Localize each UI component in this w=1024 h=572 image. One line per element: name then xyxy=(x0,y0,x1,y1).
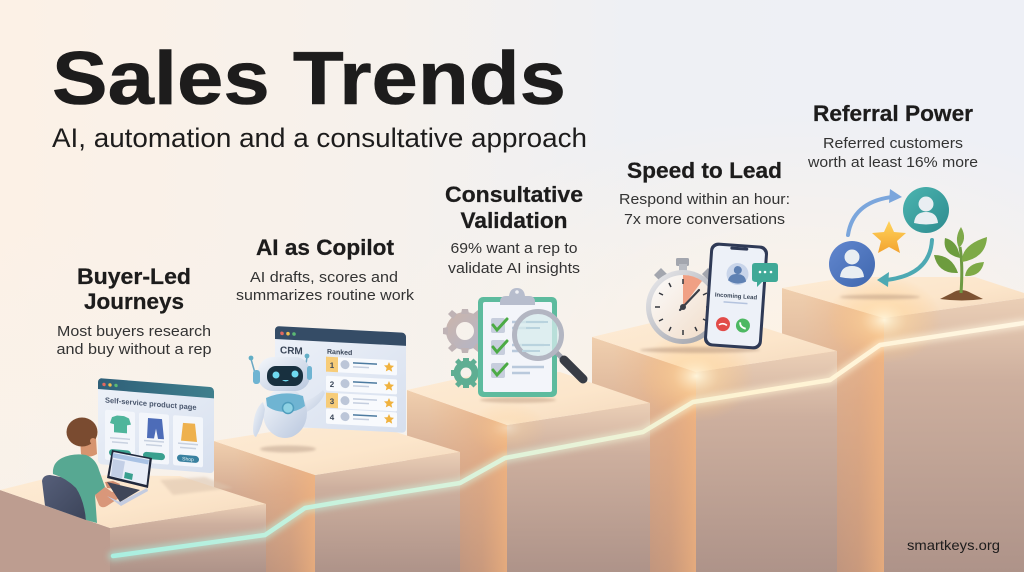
illustration: person at laptop xyxy=(42,418,233,523)
text block: AI as copilot: summarizes routine work xyxy=(236,287,415,304)
text block: consultative validation: 69% want a rep to xyxy=(450,240,578,257)
illustration: CRM ranked window xyxy=(275,326,406,433)
illustration: CRM ranked window: 3 xyxy=(330,397,335,406)
staircase: step 1 xyxy=(0,475,266,572)
staircase: step 5 xyxy=(782,277,1024,572)
staircase: step 2 xyxy=(214,425,460,572)
staircase: step 4 xyxy=(592,320,837,572)
illustration: CRM ranked window: CRM xyxy=(280,345,303,357)
text block: speed to lead: Speed to Lead xyxy=(627,158,782,183)
illustration: stopwatch xyxy=(640,258,760,353)
illustration: gears xyxy=(443,309,487,388)
illustration: self-service product page: Self-service product page xyxy=(105,396,197,412)
illustration: self-service product page xyxy=(98,378,214,473)
text block: consultative validation xyxy=(445,182,583,277)
text block: referral power: worth at least 16% more xyxy=(807,154,978,171)
text block: referral power: Referral Power xyxy=(813,101,973,126)
illustration: validation clipboard xyxy=(478,288,557,403)
light glows on step corners xyxy=(467,276,942,454)
illustration: CRM ranked window: Ranked xyxy=(327,349,352,357)
illustration: phone with incoming lead xyxy=(703,242,778,350)
illustration: referral loop xyxy=(829,187,949,300)
text block: AI as copilot xyxy=(236,235,415,304)
text block: referral power: Referred customers xyxy=(823,135,963,152)
text block: referral power xyxy=(807,101,978,171)
illustration: CRM ranked window: 2 xyxy=(330,380,335,389)
text block: AI as copilot: AI drafts, scores and xyxy=(250,269,398,286)
illustration: phone with incoming lead: Incoming Lead xyxy=(715,293,758,301)
illustration: robot copilot xyxy=(249,354,325,452)
glowing trend line xyxy=(113,323,1024,556)
text block: consultative validation: Validation xyxy=(460,208,568,233)
text block: AI as copilot: AI as Copilot xyxy=(256,235,395,260)
text block: speed to lead xyxy=(619,158,790,228)
text block: speed to lead: 7x more conversations xyxy=(624,211,785,228)
illustration: magnifying glass xyxy=(514,312,583,379)
watermark: smartkeys.org xyxy=(907,537,1000,553)
text block: buyer-led journeys xyxy=(56,264,212,358)
text block: buyer-led journeys: Journeys xyxy=(84,289,184,314)
illustration: self-service product page: Shop xyxy=(182,456,194,463)
text block: speed to lead: Respond within an hour: xyxy=(619,191,790,208)
staircase: step 3 xyxy=(407,372,650,572)
text block: buyer-led journeys: and buy without a rep xyxy=(56,341,212,358)
text block: consultative validation: Consultative xyxy=(445,182,583,207)
illustration: growing plant xyxy=(934,227,987,300)
illustration: CRM ranked window: 1 xyxy=(330,361,335,370)
title: Sales Trends xyxy=(52,36,566,120)
text block: consultative validation: validate AI insights xyxy=(448,260,580,277)
subtitle: AI, automation and a consultative approach xyxy=(52,123,587,153)
text block: buyer-led journeys: Buyer-Led xyxy=(77,264,191,289)
illustration: CRM ranked window: 4 xyxy=(330,413,335,422)
text block: buyer-led journeys: Most buyers research xyxy=(57,323,211,340)
